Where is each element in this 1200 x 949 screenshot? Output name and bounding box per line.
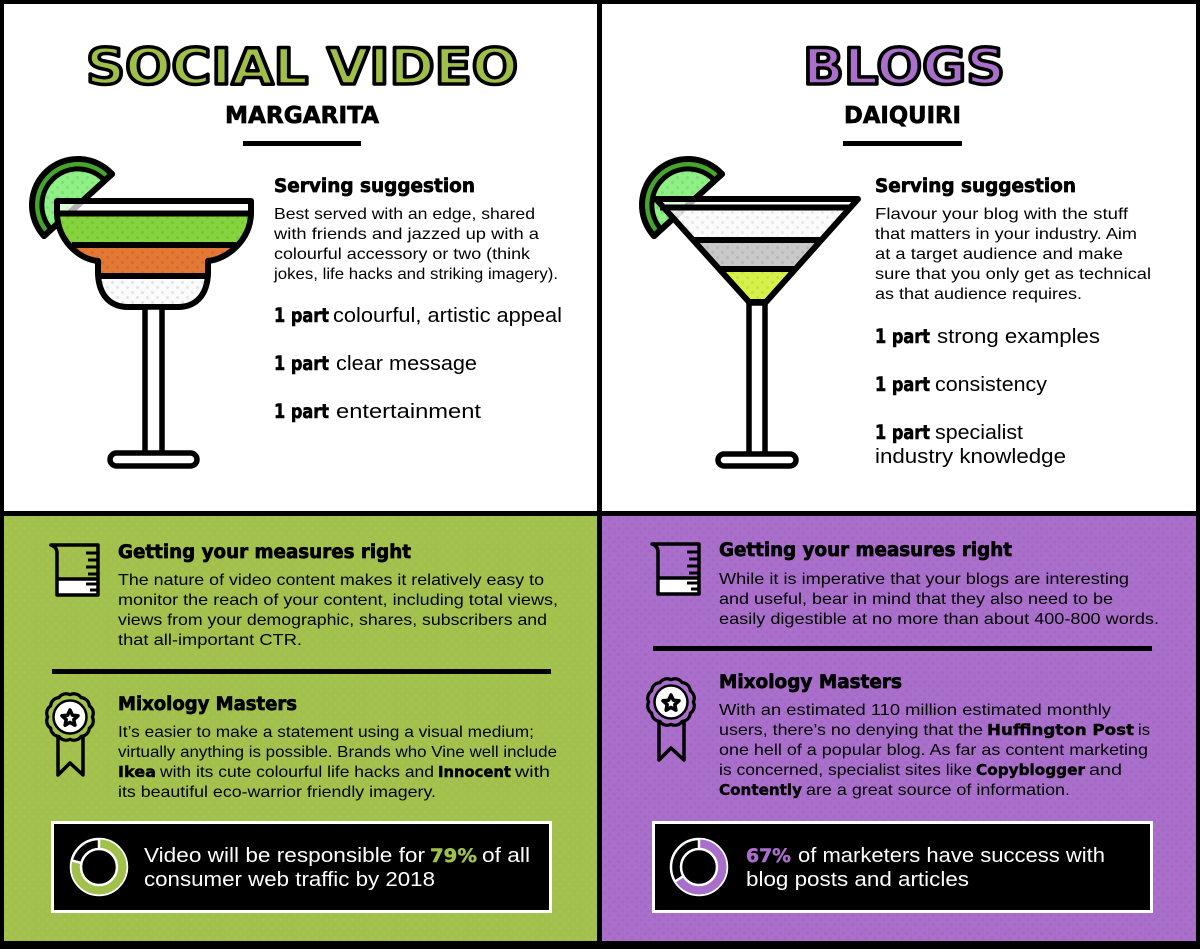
panel: social video recipe [4, 4, 597, 511]
text: blog stat: 67% [746, 845, 791, 867]
ingredient: colourful, artistic appeal [274, 304, 562, 327]
text block: serving description [875, 206, 1151, 303]
text: video stat: 79% [430, 845, 477, 867]
ingredient: specialist industry knowledge: industry knowledge [875, 446, 1066, 468]
ingredient: strong examples: strong examples [937, 326, 1100, 348]
text block: serving description: Best served with an edge, shared [274, 206, 535, 223]
heading: serving suggestion: Serving suggestion [274, 176, 475, 197]
text block: measures: While it is imperative that your blogs are interesting [719, 571, 1129, 588]
ingredient: entertainment: 1 part [274, 400, 329, 423]
icon: award rosette [648, 679, 694, 760]
heading: serving suggestion: Serving suggestion [875, 176, 1076, 197]
callout: video statistic [52, 822, 550, 912]
chart: 79% donut [71, 839, 127, 895]
ingredient: consistency: 1 part [875, 373, 930, 396]
text block: measures: monitor the reach of your content, including total views, [118, 592, 558, 609]
ingredient: entertainment: entertainment [336, 401, 482, 423]
text block: serving description: that matters in your industry. Aim [875, 226, 1137, 243]
ingredient: consistency: consistency [935, 374, 1047, 396]
text block: mixology: its beautiful eco-warrior friendly imagery. [118, 784, 436, 801]
text block: mixology: is concerned, specialist sites like [719, 762, 972, 779]
text block: mixology [719, 702, 1150, 799]
text block: mixology: Ikea [118, 763, 156, 781]
text block: serving description: Flavour your blog with the stuff [875, 206, 1129, 223]
text: video stat: consumer web traffic by 2018 [144, 869, 435, 891]
text block: mixology: It’s easier to make a statement using a visual medium; [118, 724, 534, 741]
text block: serving description: as that audience requires. [875, 286, 1082, 303]
panel: blogs tips [602, 516, 1196, 941]
text block: measures [118, 572, 558, 649]
ingredient: specialist industry knowledge: 1 part [875, 421, 930, 444]
text block: mixology: is [1138, 722, 1150, 739]
title: social video: SOCIAL VIDEO [86, 38, 518, 96]
text block: serving description: with friends and jazzed up with a [273, 226, 539, 243]
text: video stat [144, 845, 530, 891]
ingredient: clear message: 1 part [274, 352, 329, 375]
text block: serving description: colourful accessory or two (think [274, 246, 531, 263]
icon: measuring beaker [51, 545, 98, 595]
text block: mixology: and [1089, 762, 1122, 779]
heading: getting your measures right: Getting your measures right [118, 542, 411, 563]
text block: serving description: jokes, life hacks and striking imagery). [273, 266, 558, 283]
text block: serving description: sure that you only get as technical [875, 266, 1151, 283]
heading: mixology masters: Mixology Masters [118, 694, 297, 715]
ingredient: strong examples: 1 part [875, 325, 930, 348]
ingredient: clear message [274, 352, 477, 375]
text block: serving description: at a target audience and make [875, 246, 1123, 263]
text block: mixology: Copyblogger [976, 761, 1086, 779]
text block: measures: easily digestible at no more than about 400-800 words. [719, 611, 1159, 628]
subtitle: margarita: MARGARITA [225, 103, 379, 129]
text block: mixology: with its cute colourful life hacks and [159, 764, 434, 781]
text block: mixology: Huffington Post [987, 721, 1134, 739]
ingredient: colourful, artistic appeal: 1 part [274, 304, 329, 327]
ingredient: clear message: clear message [336, 353, 477, 375]
icon: measuring beaker [652, 544, 699, 594]
panel: blogs recipe [602, 4, 1196, 511]
panel: social video tips [4, 516, 597, 941]
icon: martini glass [642, 159, 858, 466]
icon: margarita glass [32, 159, 251, 466]
text block: mixology: users, there’s no denying that the [719, 722, 983, 739]
text block: serving description [273, 206, 558, 283]
text: blog stat: blog posts and articles [746, 869, 969, 891]
text block: mixology: With an estimated 110 million estimated monthly [719, 702, 1111, 719]
callout: blog statistic [654, 822, 1152, 912]
ingredient: colourful, artistic appeal: colourful, artistic appeal [333, 305, 562, 327]
text block: mixology: with [514, 764, 550, 781]
text block: measures: views from your demographic, shares, subscribers and [118, 612, 547, 629]
text block: mixology: Innocent [438, 763, 511, 781]
text: video stat: Video will be responsible for [144, 845, 425, 867]
chart: 67% donut [671, 839, 727, 895]
text: blog stat: of marketers have success with [798, 845, 1105, 867]
ingredient: strong examples [875, 325, 1100, 348]
text: video stat: of all [482, 845, 530, 867]
icon: award rosette [47, 694, 93, 775]
ingredient: entertainment [274, 400, 482, 423]
title: blogs: BLOGS [803, 38, 1005, 96]
text: blog stat [746, 845, 1105, 891]
text block: mixology [118, 724, 557, 801]
text block: measures: The nature of video content makes it relatively easy to [118, 572, 544, 589]
ingredient: consistency [875, 373, 1047, 396]
text block: measures: and useful, bear in mind that they also need to be [719, 591, 1113, 608]
subtitle: daiquiri: DAIQUIRI [844, 103, 961, 129]
text block: mixology: Contently [719, 781, 802, 799]
text block: mixology: are a great source of information. [806, 782, 1070, 799]
text block: mixology: one hell of a popular blog. As far as content marketing [719, 742, 1148, 759]
text block: mixology: virtually anything is possible. Brands who Vine well include [118, 744, 557, 761]
heading: getting your measures right: Getting your measures right [719, 540, 1012, 561]
ingredient: specialist industry knowledge: specialist [935, 422, 1023, 444]
heading: mixology masters: Mixology Masters [719, 672, 902, 693]
ingredient: specialist industry knowledge [875, 421, 1066, 468]
text block: measures [719, 571, 1159, 628]
text block: measures: that all-important CTR. [118, 632, 302, 649]
